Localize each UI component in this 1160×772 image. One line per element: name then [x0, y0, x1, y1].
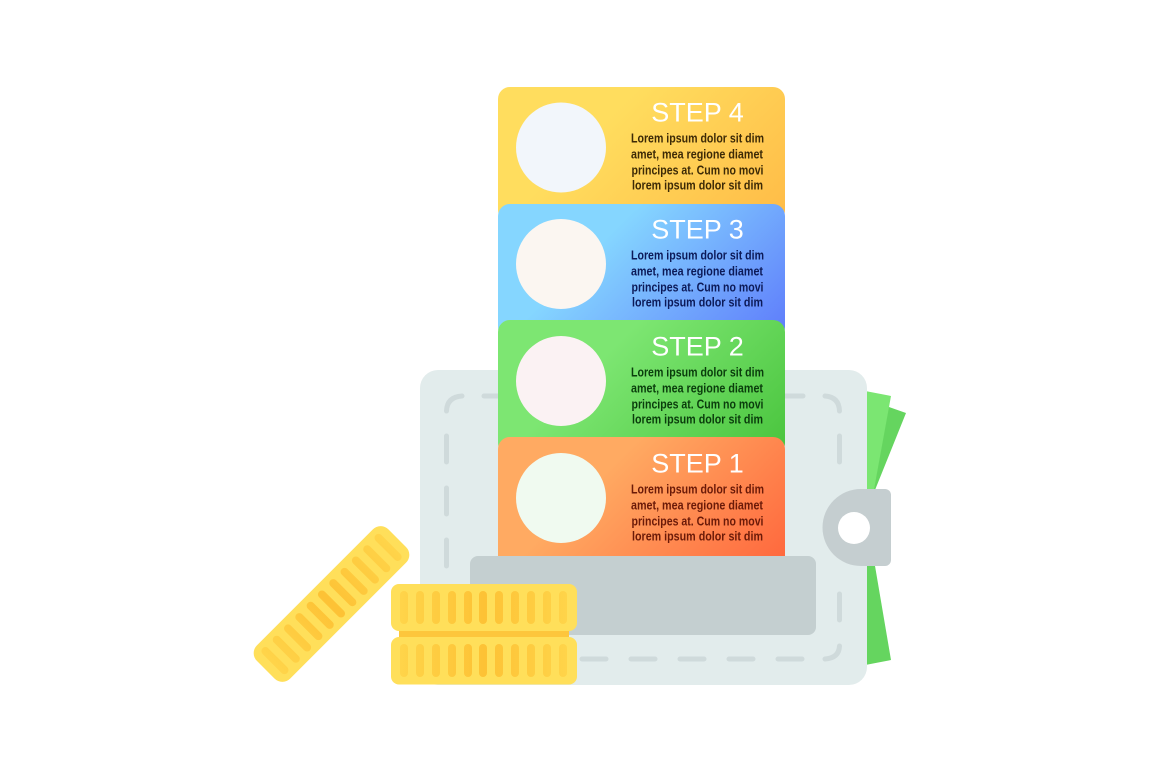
step 3 text: principes at. Cum no movi: [632, 280, 764, 294]
step 3 heading: STEP 3: [651, 214, 744, 244]
step 4 text: principes at. Cum no movi: [632, 162, 764, 178]
step 2 text: Lorem ipsum dolor sit dim: [631, 364, 764, 380]
step 4 card: [498, 87, 785, 222]
step 1 image placeholder: [516, 453, 606, 543]
bottom coin: [391, 637, 577, 684]
step 3 text: Lorem ipsum dolor sit dim: [631, 248, 764, 262]
top coin: [391, 584, 577, 631]
step 2 text: principes at. Cum no movi: [632, 396, 764, 412]
banknotes behind wallet: [860, 390, 906, 666]
wallet stitching: [446, 396, 840, 659]
wallet clasp: [822, 489, 891, 566]
tilted coin: [249, 522, 414, 686]
step 3 text: [631, 248, 764, 310]
step 3 text: amet, mea regione diamet: [631, 264, 764, 278]
step 2 text: [631, 364, 764, 426]
step 1 card: [498, 437, 785, 560]
step 1 text: amet, mea regione diamet: [631, 498, 764, 512]
step 1 heading: STEP 1: [651, 448, 744, 478]
step 4 text: [631, 130, 764, 192]
step 4 heading: STEP 4: [651, 98, 744, 128]
step 2 heading: STEP 2: [651, 332, 744, 362]
step 2 text: amet, mea regione diamet: [631, 380, 764, 396]
step 2 text: lorem ipsum dolor sit dim: [632, 412, 763, 426]
coin stack: [391, 584, 577, 684]
step 4 text: Lorem ipsum dolor sit dim: [631, 130, 764, 146]
step 1 text: principes at. Cum no movi: [632, 514, 764, 528]
wallet body: [420, 370, 867, 685]
step 2 card: [498, 320, 785, 455]
step 1 text: Lorem ipsum dolor sit dim: [631, 482, 764, 496]
step 4 text: amet, mea regione diamet: [631, 146, 764, 162]
step 4 image placeholder: [516, 102, 606, 192]
step 2 image placeholder: [516, 336, 606, 426]
step 3 card: [498, 204, 785, 339]
wallet pocket: [470, 556, 816, 635]
step 3 text: lorem ipsum dolor sit dim: [632, 294, 763, 310]
step 4 text: lorem ipsum dolor sit dim: [632, 178, 763, 192]
step 1 text: [631, 482, 764, 544]
step 1 text: lorem ipsum dolor sit dim: [632, 528, 763, 544]
step 3 image placeholder: [516, 219, 606, 309]
